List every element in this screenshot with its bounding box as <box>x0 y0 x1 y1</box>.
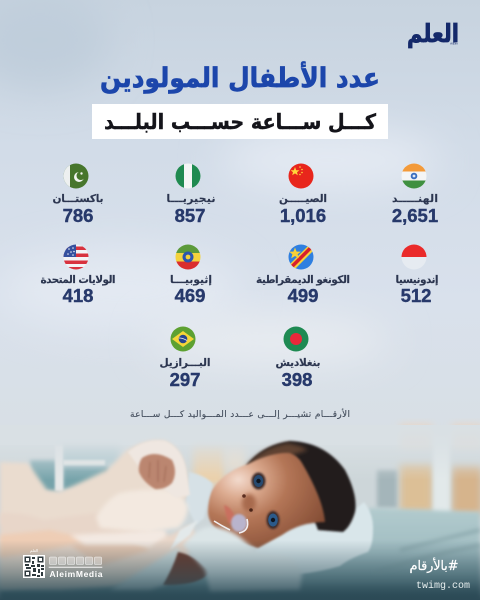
baby hair <box>246 441 356 532</box>
country: India: الهنـــــد <box>392 193 438 205</box>
country: China <box>279 163 327 226</box>
country: Pakistan: باكستـــان <box>52 193 104 205</box>
country: Nigeria <box>166 163 216 226</box>
country: Pakistan: 786 <box>63 205 93 226</box>
nose and mouth <box>224 494 256 524</box>
country: Ethiopia: إثيوبيـــا <box>170 274 212 286</box>
country: China: الصيـــــن <box>279 193 327 205</box>
watermark: twimg.com <box>416 580 470 592</box>
flag: Nigeria <box>175 163 201 189</box>
QR code <box>23 548 45 578</box>
country: Nigeria: 857 <box>175 205 205 226</box>
country: Pakistan <box>52 163 104 226</box>
big fold <box>96 489 188 533</box>
country: Bangladesh <box>276 326 321 390</box>
country: Bangladesh: بنغلاديش <box>276 357 321 369</box>
bed sheet <box>0 508 480 600</box>
flag: DR Congo <box>288 244 314 270</box>
baby photo <box>0 425 480 600</box>
shirt behind <box>186 472 213 525</box>
country: DR Congo: الكونغو الديمقراطية <box>256 274 350 286</box>
country: Indonesia: إندونيسيا <box>396 274 438 286</box>
country: Indonesia: 512 <box>401 285 431 306</box>
country: DR Congo <box>256 244 350 302</box>
country: Bangladesh: 398 <box>282 369 312 390</box>
country: Ethiopia <box>170 244 212 306</box>
lower layers <box>0 513 200 590</box>
country: DR Congo: 499 <box>288 285 318 306</box>
flag: USA <box>63 244 89 270</box>
country: India <box>392 163 438 226</box>
flag: China <box>288 163 314 189</box>
QR code: العلم <box>30 548 38 553</box>
subtitle box <box>92 104 388 139</box>
flag: Indonesia <box>401 244 427 270</box>
flag: Brazil <box>170 326 196 352</box>
white shirt lump left of lower hand <box>110 547 180 590</box>
country: USA: 418 <box>63 285 93 306</box>
pillow <box>255 502 373 574</box>
flag: Ethiopia <box>175 244 201 270</box>
baby face <box>208 453 325 548</box>
country: Brazil: البـــرازيل <box>160 357 210 369</box>
sleeve and upper hand <box>128 440 190 498</box>
country: Brazil: 297 <box>170 369 200 390</box>
country: Nigeria: نيجيريـــا <box>166 193 216 205</box>
country: Brazil <box>160 326 210 390</box>
title: عدد الأطفال المولودين <box>100 61 380 94</box>
blanket <box>0 440 213 590</box>
subtitle box: كـــل ســـاعة حســـب البلـــد <box>104 110 377 134</box>
handle: AleimMedia <box>50 569 103 579</box>
country: USA: الولايات المتحدة <box>40 274 116 286</box>
nursery backdrop <box>0 425 480 600</box>
country: USA <box>40 244 116 306</box>
flag: Pakistan <box>63 163 89 189</box>
hashtag: #بالأرقام <box>410 557 458 574</box>
logo: العلم <box>407 19 459 48</box>
bottom shade <box>0 540 480 600</box>
white fold over hand <box>183 527 302 592</box>
country: Indonesia <box>396 244 438 306</box>
logo: AlElm <box>450 42 458 46</box>
pacifier <box>214 514 248 533</box>
country: China: 1,016 <box>280 205 326 226</box>
social icons <box>49 557 102 568</box>
eyes <box>252 472 280 529</box>
flag: Bangladesh <box>283 326 309 352</box>
far left knit <box>0 440 190 525</box>
footnote: الأرقـــام تشيـــر إلـــى عـــدد المـــواليد كـــل ســـاعة <box>130 408 350 420</box>
flag: India <box>401 163 427 189</box>
country: Ethiopia: 469 <box>175 285 205 306</box>
lower hand <box>163 552 210 585</box>
country: India: 2,651 <box>392 205 438 226</box>
